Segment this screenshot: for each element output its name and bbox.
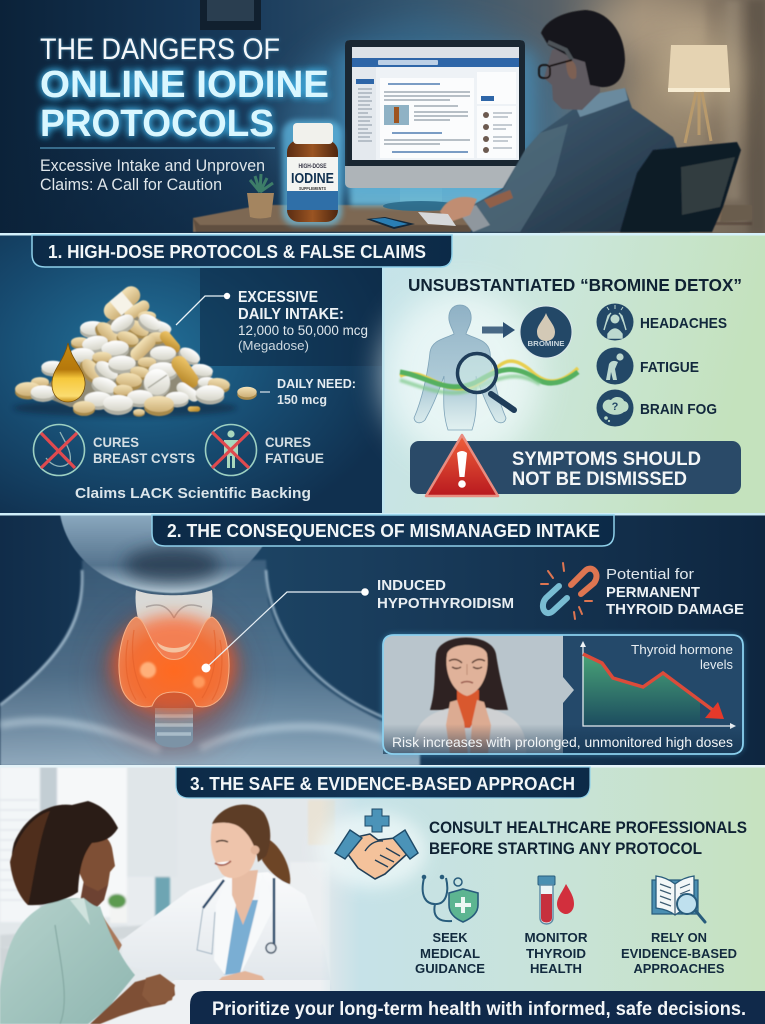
- symptom: brain fog: [596, 390, 717, 426]
- text: claims lack scientific backing: Claims LACK Scientific Backing: [75, 485, 311, 502]
- title: ONLINE IODINE: [40, 64, 329, 106]
- desk: [100, 980, 330, 1024]
- footer banner: [190, 991, 765, 1024]
- callout: daily need: [237, 376, 356, 407]
- callout bar: symptoms should not be dismissed: [410, 435, 741, 496]
- icon: human silhouette with magnifier: [400, 305, 578, 430]
- keyboard: [418, 212, 456, 226]
- heading: section 1: [32, 235, 452, 267]
- callout: excessive daily intake: DAILY INTAKE:: [238, 306, 344, 323]
- iodine supplement bottle: IODINE: [291, 171, 334, 187]
- callout: excessive daily intake: EXCESSIVE: [238, 289, 318, 306]
- iodine supplement bottle: SUPPLEMENTS: [299, 186, 326, 191]
- symptom: fatigue: FATIGUE: [640, 359, 699, 376]
- panel: header: [0, 0, 765, 240]
- title: PROTOCOLS: [40, 103, 274, 145]
- symptom: headaches: HEADACHES: [640, 315, 727, 332]
- panel: section 1 right, bromine detox: [384, 235, 765, 514]
- phone: [366, 217, 415, 229]
- callout: induced hypothyroidism: [202, 577, 514, 672]
- iodine supplement bottle: [282, 120, 342, 226]
- patient: [0, 801, 175, 1024]
- text: permanent thyroid damage: THYROID DAMAGE: [606, 601, 744, 618]
- heading: section 1: 1. HIGH-DOSE PROTOCOLS & FALSE CLAIMS: [48, 241, 426, 262]
- callout: induced hypothyroidism: HYPOTHYROIDISM: [377, 595, 514, 612]
- photo: woman holding throat: [414, 638, 526, 754]
- heading: section 3: [176, 767, 590, 798]
- icon: oil drop: [52, 343, 85, 402]
- symptom: brain fog: BRAIN FOG: [640, 401, 717, 418]
- doctor: [95, 804, 332, 990]
- item: monitor thyroid health: HEALTH: [530, 961, 582, 976]
- callout bar: symptoms should not be dismissed: SYMPTOMS SHOULD: [512, 449, 701, 470]
- heading: section 2: 2. THE CONSEQUENCES OF MISMANAGED INTAKE: [167, 520, 600, 541]
- symptom: brain fog: ?: [612, 401, 619, 413]
- line chart: thyroid hormone levels: Thyroid hormone: [631, 643, 733, 657]
- footer banner: Prioritize your long-term health with informed, safe decisions.: [212, 999, 746, 1020]
- heading: section 2: [152, 515, 614, 546]
- icon: handshake with cross: [335, 809, 418, 879]
- callout: daily need: 150 mcg: [277, 392, 327, 407]
- text: risk increases: Risk increases with prolonged, unmonitored high doses: [392, 734, 733, 750]
- man at computer: [440, 10, 692, 232]
- subtitle: Excessive Intake and Unproven: [40, 156, 265, 175]
- heading: consult healthcare professionals: BEFORE STARTING ANY PROTOCOL: [429, 840, 702, 858]
- heading: section 3: 3. THE SAFE & EVIDENCE-BASED APPROACH: [190, 773, 575, 794]
- computer monitor: [338, 40, 534, 211]
- callout: induced hypothyroidism: INDUCED: [377, 577, 446, 594]
- text: cures breast cysts: CURES: [93, 435, 139, 450]
- panel: section 1 left, pills and claims: [0, 235, 384, 514]
- line chart: thyroid hormone levels: [580, 641, 736, 729]
- callout bar: symptoms should not be dismissed: NOT BE DISMISSED: [512, 469, 687, 490]
- symptom: headaches: [596, 304, 727, 340]
- item: seek medical guidance: GUIDANCE: [415, 961, 485, 976]
- text: permanent thyroid damage: PERMANENT: [606, 584, 700, 601]
- icon: broken chain: [541, 563, 597, 619]
- callout: excessive daily intake: (Megadose): [238, 338, 309, 353]
- office chair: [620, 142, 741, 232]
- panel: section 3, safe approach: [0, 767, 765, 1024]
- callout: excessive daily intake: 12,000 to 50,000 mcg: [238, 323, 368, 338]
- panel: section 1 left, pills and claims: BREAST CYSTS: [93, 451, 195, 466]
- heading: consult healthcare professionals: [429, 819, 747, 858]
- item: rely on evidence-based approaches: [621, 876, 737, 976]
- callout: daily need: DAILY NEED:: [277, 376, 356, 391]
- subtitle: [40, 148, 275, 194]
- item: monitor thyroid health: [524, 876, 588, 976]
- illustration: neck and thyroid: [0, 514, 420, 766]
- callout: excessive daily intake: [176, 289, 368, 353]
- panel: section 2, consequences: [0, 514, 765, 766]
- pill pile: [15, 283, 231, 417]
- icon: bromine drop: BROMINE: [528, 339, 564, 348]
- item: rely on evidence-based approaches: EVIDENCE-BASED: [621, 946, 737, 961]
- text: permanent thyroid damage: Potential for: [606, 567, 694, 583]
- desk: [193, 205, 752, 232]
- item: monitor thyroid health: MONITOR: [524, 930, 588, 945]
- divider lines: [0, 233, 765, 768]
- title: [40, 33, 329, 145]
- item: seek medical guidance: [415, 875, 485, 976]
- panel: risk photo and hormone chart: [382, 634, 744, 755]
- item: seek medical guidance: MEDICAL: [420, 946, 480, 961]
- panel background: consult section: [320, 767, 765, 1024]
- icon: crossed-out breast: [34, 424, 84, 476]
- text: permanent thyroid damage: [606, 567, 744, 618]
- text: cures fatigue: CURES: [265, 435, 311, 450]
- curtain: [706, 0, 765, 234]
- item: monitor thyroid health: THYROID: [526, 946, 586, 961]
- symptom: fatigue: [596, 348, 699, 384]
- iodine supplement bottle: HIGH-DOSE: [298, 164, 326, 170]
- panel: section 1 left, pills and claims: FATIGUE: [265, 451, 324, 466]
- subtitle: Claims: A Call for Caution: [40, 175, 222, 194]
- potted plant: [247, 174, 274, 218]
- heading: consult healthcare professionals: CONSULT HEALTHCARE PROFESSIONALS: [429, 819, 747, 837]
- title: THE DANGERS OF: [40, 33, 280, 66]
- icon: crossed-out fatigue: [206, 424, 256, 476]
- table lamp: [653, 30, 745, 143]
- icon: bromine drop: [520, 306, 572, 358]
- heading: bromine detox: UNSUBSTANTIATED “BROMINE DETOX”: [408, 275, 742, 295]
- picture frame: [200, 0, 261, 30]
- photo: patient and doctor: [0, 767, 335, 1024]
- item: rely on evidence-based approaches: APPROACHES: [634, 961, 725, 976]
- arrow to bromine: [482, 322, 515, 338]
- line chart: thyroid hormone levels: levels: [700, 658, 733, 672]
- item: seek medical guidance: SEEK: [432, 930, 468, 945]
- item: rely on evidence-based approaches: RELY ON: [651, 930, 707, 945]
